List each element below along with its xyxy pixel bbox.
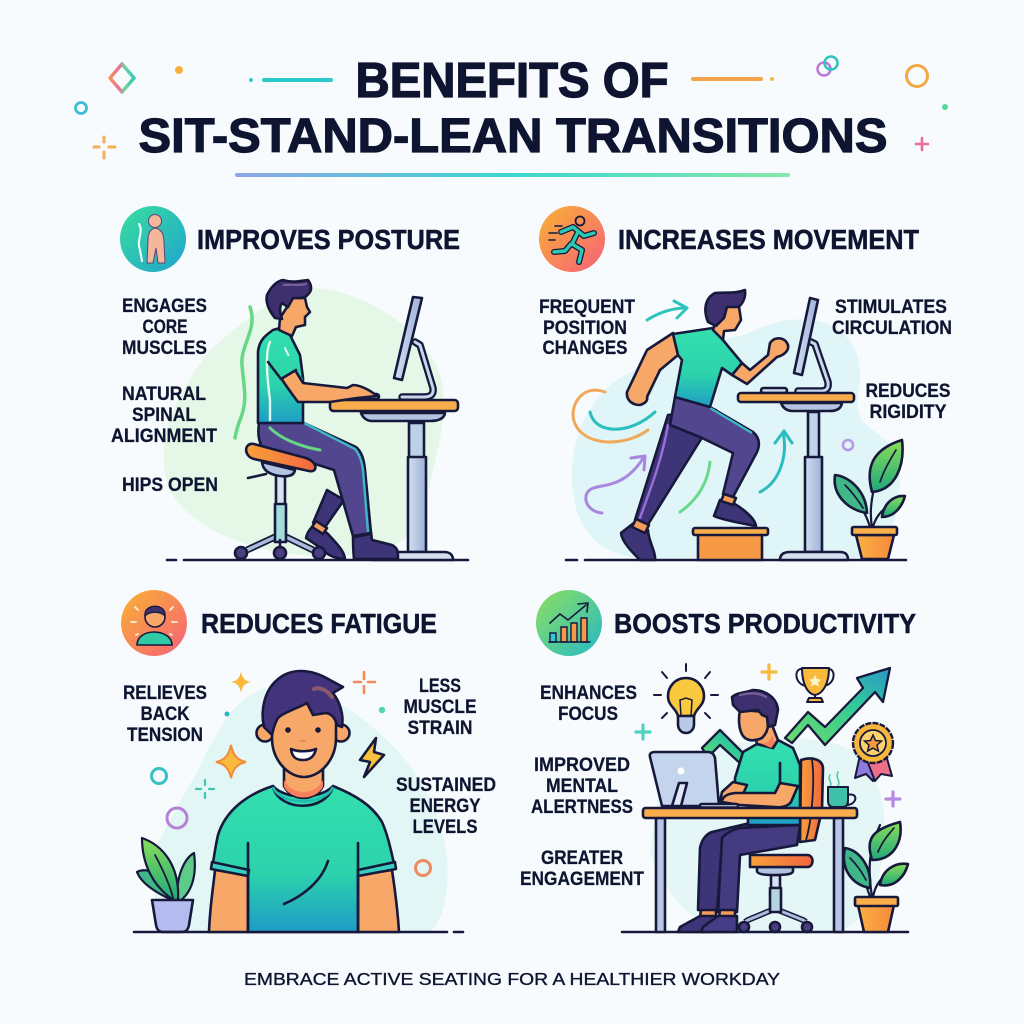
icon: relaxed person [121,590,187,656]
step box [693,528,768,560]
labels: LESS [419,675,461,697]
person working [678,690,800,932]
heading: INCREASES MOVEMENT [618,224,919,255]
person stepping [621,290,788,560]
heading: REDUCES FATIGUE [201,608,437,639]
labels: LEVELS [412,816,478,838]
laptop [650,752,738,808]
footer tagline: EMBRACE ACTIVE SEATING FOR A HEALTHIER WORKDAY [244,969,780,989]
title [138,54,888,163]
labels: ENERGY [410,795,480,817]
labels: NATURAL [122,383,206,405]
panel: reduces fatigue [121,590,496,932]
labels: CIRCULATION [832,317,952,339]
background blob [164,288,443,556]
ground line [167,559,468,561]
plus signs [636,665,900,806]
labels: IMPROVED [534,754,630,776]
heading: IMPROVES POSTURE [197,224,460,255]
labels: MUSCLES [122,337,207,359]
labels: FOCUS [558,703,618,725]
labels [123,675,496,838]
panel: boosts productivity [520,590,916,932]
plant [844,822,908,932]
labels: ALERTNESS [531,796,633,818]
title underline [235,173,790,177]
desk top [643,808,857,818]
standing desk [330,297,458,560]
labels: MENTAL [546,775,618,797]
person smiling [209,671,399,932]
labels: BACK [140,703,190,725]
labels: REDUCES [866,380,950,402]
icon: light bulb [654,664,718,733]
panel: increases movement [539,206,952,560]
chair back [800,759,823,842]
person sitting [258,280,398,559]
ground line [566,559,906,561]
labels: HIPS OPEN [122,474,218,496]
title: SIT-STAND-LEAN TRANSITIONS [138,110,888,163]
labels: RIGIDITY [870,401,946,423]
labels: SUSTAINED [396,774,496,796]
labels [539,296,952,423]
plant [835,440,905,559]
labels: STIMULATES [835,296,947,318]
labels: GREATER [541,847,623,869]
sparkles [152,671,430,876]
labels: RELIEVES [123,682,207,704]
labels: CHANGES [542,337,628,359]
trend arrow [702,668,890,765]
labels: SPINAL [132,404,196,426]
labels: CORE [142,316,188,338]
background blob [650,738,885,932]
labels: FREQUENT [539,296,635,318]
office chair [739,855,812,932]
icon: trophy [796,668,834,702]
title: BENEFITS OF [356,54,668,108]
labels: ENGAGES [122,295,207,317]
labels: ALIGNMENT [111,425,217,447]
labels [111,295,218,496]
icon: award badge [853,723,893,781]
standing desk [738,298,854,560]
lightning bolt [360,738,384,777]
icon: posture [120,206,186,272]
labels: MUSCLE [404,696,476,718]
coffee cup [828,772,855,807]
ground line [134,931,463,933]
motion arrows [573,301,853,513]
spine line [235,307,252,438]
labels: TENSION [127,724,203,746]
panel: improves posture [111,206,468,560]
header decorations [76,56,948,158]
labels: ENHANCES [540,682,637,704]
stool [235,444,325,559]
labels: ENGAGEMENT [520,868,644,890]
labels: STRAIN [408,717,472,739]
icon: runner [539,206,605,272]
icon: growth chart [536,590,602,656]
background blob [152,687,448,932]
background blob [572,319,900,558]
labels [520,682,644,890]
heading: BOOSTS PRODUCTIVITY [614,608,916,639]
ground line [622,931,908,933]
plant [137,838,195,932]
labels: POSITION [543,317,627,339]
desk legs [656,818,843,932]
